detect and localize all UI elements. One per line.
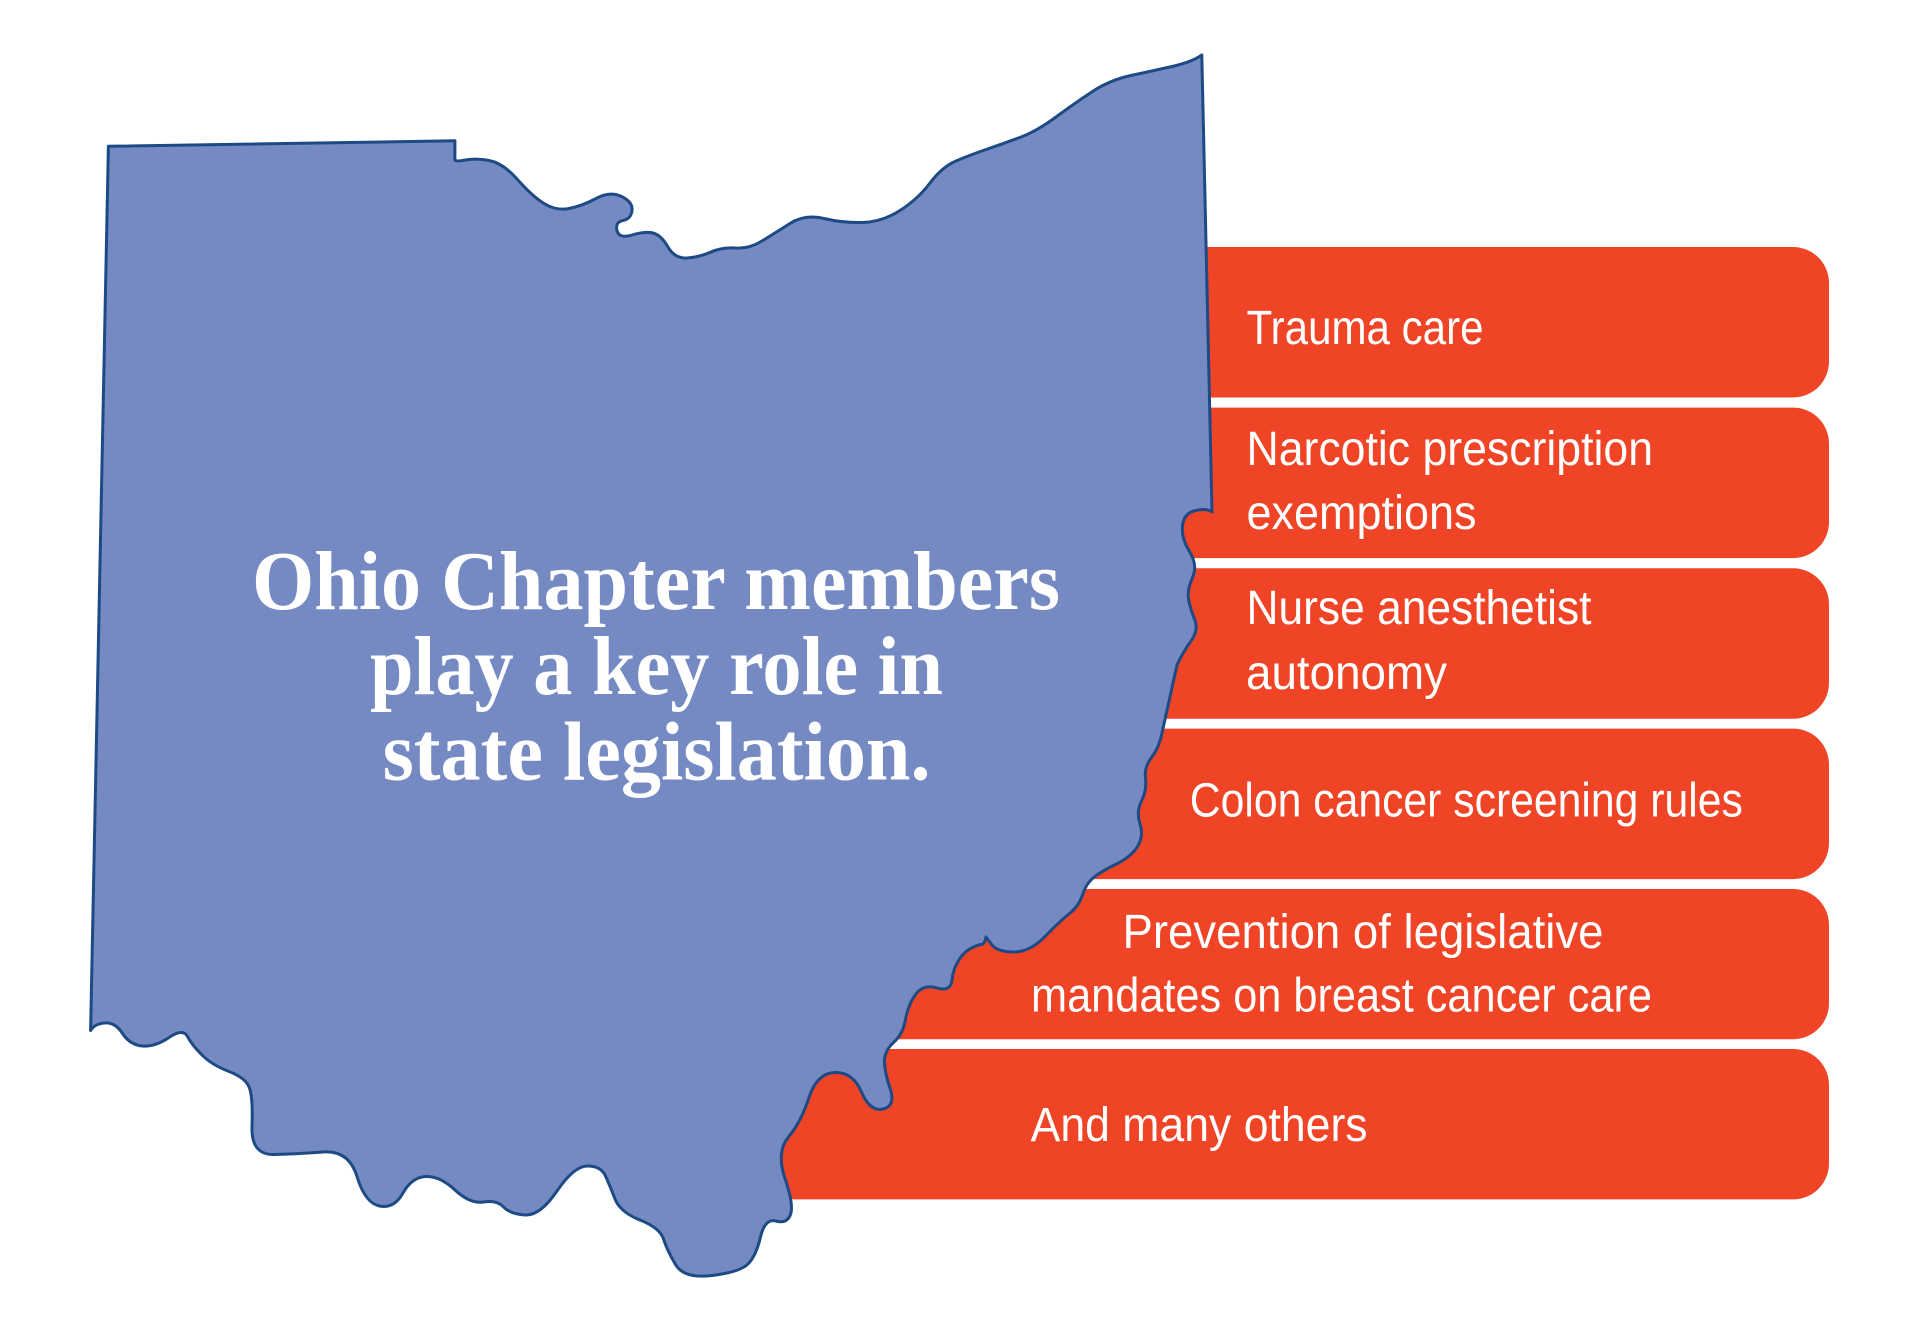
bar: narcotic prescription exemptions: exemptions bbox=[1246, 487, 1476, 540]
bar: prevention of legislative mandates on breast cancer care: mandates on breast cancer care bbox=[1031, 970, 1652, 1022]
heading: Ohio Chapter members play a key role in state legislation: play a key role in bbox=[370, 620, 943, 713]
heading: Ohio Chapter members play a key role in state legislation bbox=[252, 535, 1060, 798]
bar: trauma care: Trauma care bbox=[1246, 302, 1484, 355]
bar: nurse anesthetist autonomy: autonomy bbox=[1246, 647, 1447, 700]
bar: narcotic prescription exemptions: Narcotic prescription bbox=[1246, 423, 1653, 476]
map: outline of Ohio bbox=[91, 55, 1212, 1276]
bar: nurse anesthetist autonomy bbox=[800, 568, 1829, 719]
heading: Ohio Chapter members play a key role in state legislation: state legislation. bbox=[383, 706, 931, 798]
bar: prevention of legislative mandates on breast cancer care: Prevention of legislative bbox=[1122, 906, 1604, 959]
bar: and many others bbox=[740, 1049, 1829, 1199]
bar: colon cancer screening rules bbox=[800, 729, 1829, 879]
bar: prevention of legislative mandates on breast cancer care bbox=[800, 889, 1829, 1039]
bar: trauma care bbox=[800, 247, 1829, 398]
heading: Ohio Chapter members play a key role in state legislation: Ohio Chapter members bbox=[252, 535, 1060, 628]
bar: nurse anesthetist autonomy: Nurse anesthetist bbox=[1246, 582, 1592, 635]
bar: and many others: And many others bbox=[1031, 1099, 1368, 1152]
bar: narcotic prescription exemptions bbox=[800, 408, 1829, 558]
panel: legislation topics list bbox=[740, 247, 1829, 1199]
bar: colon cancer screening rules: Colon cancer screening rules bbox=[1190, 774, 1743, 828]
